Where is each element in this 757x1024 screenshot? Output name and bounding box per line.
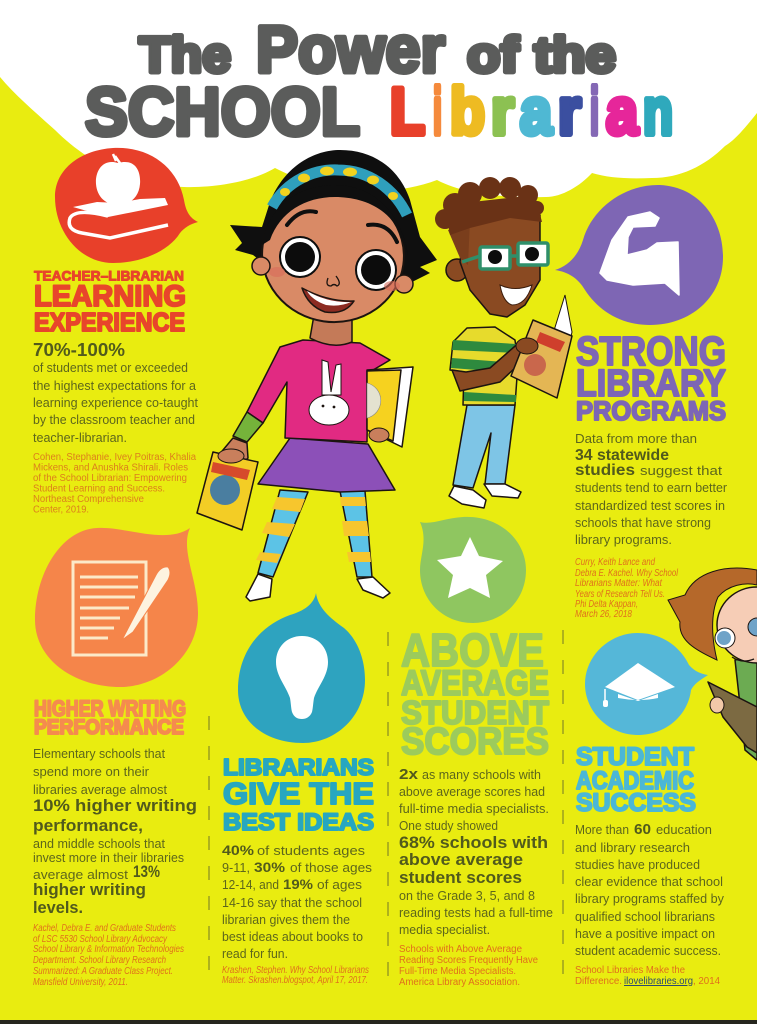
statistic text: 19%: [283, 876, 314, 892]
statistic text: [399, 766, 553, 937]
statistic text: [575, 821, 724, 958]
heading: STUDENT: [576, 743, 694, 771]
girl skirt: [258, 438, 395, 492]
heading: EXPERIENCE: [34, 307, 185, 337]
statistic text: Elementary schools that: [33, 746, 165, 761]
girl headband: [272, 166, 407, 215]
statistic text: 14-16 say that the school: [222, 895, 362, 910]
statistic text: invest more in their libraries: [33, 850, 184, 865]
heading: GIVE THE: [223, 776, 374, 811]
title word: Librarian in rainbow letters: a: [520, 74, 553, 148]
boy head: [446, 207, 540, 317]
statistic text: More than: [575, 822, 629, 837]
statistic text: average almost: [33, 867, 128, 882]
statistic text: education: [656, 822, 712, 837]
heading: [34, 696, 186, 739]
statistic text: and library research: [575, 840, 690, 855]
panel: librarians give the best ideas: [222, 593, 374, 986]
girl right book: [367, 367, 413, 447]
statistic text: 9-11,: [222, 860, 250, 875]
citation: [33, 452, 196, 516]
statistic text: 2x: [399, 766, 419, 783]
statistic text: performance,: [33, 816, 143, 835]
title word: Librarian in rainbow letters: r: [558, 74, 581, 148]
heading: [401, 624, 549, 763]
statistic text: library programs.: [575, 532, 672, 547]
citation: [222, 965, 369, 986]
heading: [576, 743, 696, 817]
statistic text: higher writing: [33, 880, 146, 899]
girl legs striped tights: [246, 490, 390, 601]
bunny on shirt: [309, 360, 349, 425]
panel: student academic success: [575, 633, 724, 987]
title: SCHOOL: [85, 74, 360, 150]
statistic text: [33, 746, 197, 917]
dashed column dividers: [209, 630, 563, 985]
statistic text: 30%: [254, 859, 286, 875]
illustration: girl with books: [197, 150, 437, 601]
statistic text: [575, 431, 728, 547]
statistic text: Data from more than: [575, 431, 697, 446]
statistic text: student academic success.: [575, 943, 721, 958]
title word: Librarian in rainbow letters: r: [491, 74, 514, 148]
statistic text: students tend to earn better: [575, 480, 728, 495]
statistic text: studies: [575, 462, 635, 479]
illustration: third child peeking: [668, 568, 757, 760]
girl face: [252, 179, 413, 331]
heading: TEACHER–LIBRARIAN: [34, 268, 184, 284]
citation: Center, 2019.: [33, 504, 89, 516]
citation: [33, 923, 184, 988]
icon: paper and pen in orange speech bubble: [35, 528, 198, 687]
title word: Librarian in rainbow letters: n: [643, 74, 673, 148]
statistic text: on the Grade 3, 5, and 8: [399, 888, 535, 903]
heading: BEST IDEAS: [223, 809, 374, 836]
statistic text: clear evidence that school: [575, 874, 723, 889]
heading: LIBRARY: [576, 363, 726, 405]
statistic text: by the classroom teacher and: [33, 412, 195, 427]
icon: star in green speech bubble: [420, 517, 526, 623]
statistic text: library programs staffed by: [575, 891, 724, 906]
heading: LIBRARIANS: [223, 754, 374, 780]
statistic text: 40%: [222, 842, 255, 858]
icon: light bulb in teal speech bubble: [238, 593, 365, 743]
boy arm: [452, 340, 532, 391]
statistic text: [222, 842, 373, 961]
citation: ilovelibraries.org: [624, 976, 693, 987]
girl neck: [310, 315, 352, 345]
statistic text: 34 statewide: [575, 447, 669, 464]
statistic text: and middle schools that: [33, 836, 165, 851]
statistic text: studies have produced: [575, 857, 700, 872]
statistic text: reading tests had a full-time: [399, 905, 553, 920]
citation: School Library & Information Technologies: [33, 944, 184, 955]
citation: [399, 944, 538, 988]
statistic text: read for fun.: [222, 946, 288, 961]
title word: Librarian in rainbow letters: i: [433, 74, 442, 148]
title word: Librarian in rainbow letters: a: [606, 74, 639, 148]
statistic text: the highest expectations for a: [33, 378, 197, 393]
citation: Summarized: A Graduate Class Project.: [33, 966, 173, 977]
boy open book: [511, 295, 572, 398]
statistic text: levels.: [33, 898, 83, 917]
statistic text: media specialist.: [399, 922, 490, 937]
title word: Librarian in rainbow letters: b: [450, 74, 485, 148]
citation: Northeast Comprehensive: [33, 494, 144, 505]
heading: PROGRAMS: [576, 396, 726, 426]
statistic text: 10% higher writing: [33, 796, 197, 815]
citation: Schools with Above Average: [399, 944, 522, 955]
statistic text: 60: [634, 821, 651, 838]
girl front hair: [262, 185, 408, 255]
girl hair back: [230, 150, 437, 284]
heading: PERFORMANCE: [34, 716, 184, 739]
title word: Librarian in rainbow letters: i: [590, 74, 599, 148]
title: Power: [256, 12, 445, 86]
statistic text: as many schools with: [422, 767, 541, 782]
citation: Cohen, Stephanie, Ivey Poitras, Khalia: [33, 452, 196, 463]
citation: Mansfield University, 2011.: [33, 977, 128, 988]
citation: Reading Scores Frequently Have: [399, 955, 538, 966]
icon: graduation cap in blue speech bubble: [585, 633, 708, 735]
citation: Matter. Skrashen.blogspot, April 17, 2017.: [222, 975, 368, 986]
heading: SCORES: [401, 721, 549, 763]
statistic text: librarian gives them the: [222, 912, 350, 927]
citation: of LSC 5530 School Library Advocacy: [33, 934, 168, 945]
statistic text: 12-14, and: [222, 877, 279, 892]
citation: Curry, Keith Lance and: [575, 557, 655, 568]
footer bar: [0, 1020, 757, 1024]
citation: Difference.: [575, 976, 622, 987]
statistic text: schools that have strong: [575, 515, 711, 530]
statistic text: student scores: [399, 869, 522, 887]
statistic text: of ages: [317, 877, 363, 892]
girl pink shirt and arm: [218, 340, 390, 470]
title: The: [139, 27, 231, 83]
statistic text: best ideas about books to: [222, 929, 363, 944]
panel: higher writing performance: [33, 528, 198, 988]
panel: strong library programs: [555, 185, 728, 620]
heading: HIGHER WRITING: [34, 696, 186, 721]
title: of the: [467, 27, 616, 83]
boy green glasses: [462, 243, 548, 269]
heading: STRONG: [576, 328, 726, 374]
heading: [576, 328, 726, 426]
icon: apple on book in red speech bubble: [55, 148, 198, 263]
citation: Librarians Matter: What: [575, 578, 663, 589]
title: [85, 12, 673, 150]
citation: March 26, 2018: [575, 609, 632, 620]
heading: SUCCESS: [576, 789, 696, 817]
statistic text: teacher-librarian.: [33, 430, 127, 445]
citation: , 2014: [693, 976, 720, 987]
citation: Department. School Library Research: [33, 955, 166, 966]
statistic text: above average scores had: [399, 784, 545, 799]
illustration: boy reading: [435, 177, 572, 508]
statistic text: have a positive impact on: [575, 926, 715, 941]
citation: [575, 557, 679, 620]
statistic text: of students met or exceeded: [33, 360, 188, 375]
boy shoes: [449, 484, 521, 508]
statistic text: learning experience co-taught: [33, 395, 198, 410]
statistic text: 68% schools with: [399, 834, 548, 852]
panel: above average student scores: [399, 517, 553, 988]
statistic text: One study showed: [399, 818, 498, 833]
citation: Krashen, Stephen. Why School Librarians: [222, 965, 369, 976]
citation: Years of Research Tell Us.: [575, 589, 665, 600]
icon: flexed arm in purple speech bubble: [555, 185, 723, 325]
citation: Full-Time Media Specialists.: [399, 966, 516, 977]
heading: AVERAGE: [401, 664, 549, 703]
citation: Debra E. Kachel. Why School: [575, 568, 679, 579]
statistic text: 70%-100%: [33, 340, 125, 360]
citation: Phi Delta Kappan,: [575, 599, 638, 610]
statistic text: of those ages: [290, 860, 373, 875]
statistic text: above average: [399, 851, 523, 869]
statistic text: full-time media specialists.: [399, 801, 549, 816]
panel: teacher-librarian learning experience: [33, 148, 198, 516]
statistic text: of students ages: [257, 843, 366, 858]
citation: Mickens, and Anushka Shirali. Roles: [33, 462, 188, 474]
heading: ABOVE: [401, 624, 544, 676]
statistic text: spend more on their: [33, 764, 150, 779]
girl left book: [197, 449, 258, 530]
heading: LEARNING: [34, 280, 186, 313]
statistic text: standardized test scores in: [575, 498, 725, 513]
statistic text: suggest that: [640, 463, 722, 478]
statistic text: [33, 340, 198, 445]
citation: School Libraries Make the: [575, 965, 685, 976]
white cloud header: [0, 0, 757, 197]
title word: Librarian in rainbow letters: L: [390, 74, 425, 148]
citation: Student Learning and Success.: [33, 484, 165, 494]
boy jeans: [453, 405, 515, 488]
heading: STUDENT: [401, 694, 549, 731]
statistic text: libraries average almost: [33, 782, 167, 797]
heading: ACADEMIC: [576, 767, 694, 795]
citation: America Library Association.: [399, 977, 520, 988]
boy striped shirt: [450, 327, 518, 405]
citation: Kachel, Debra E. and Graduate Students: [33, 923, 176, 934]
title word: Librarian in rainbow letters: [390, 74, 673, 148]
heading: [223, 754, 374, 836]
boy curly hair: [435, 177, 544, 235]
citation: [575, 965, 720, 987]
statistic text: qualified school librarians: [575, 909, 715, 924]
heading: [34, 268, 186, 337]
statistic text: 13%: [133, 862, 160, 881]
citation: of the School Librarian: Empowering: [33, 473, 187, 484]
